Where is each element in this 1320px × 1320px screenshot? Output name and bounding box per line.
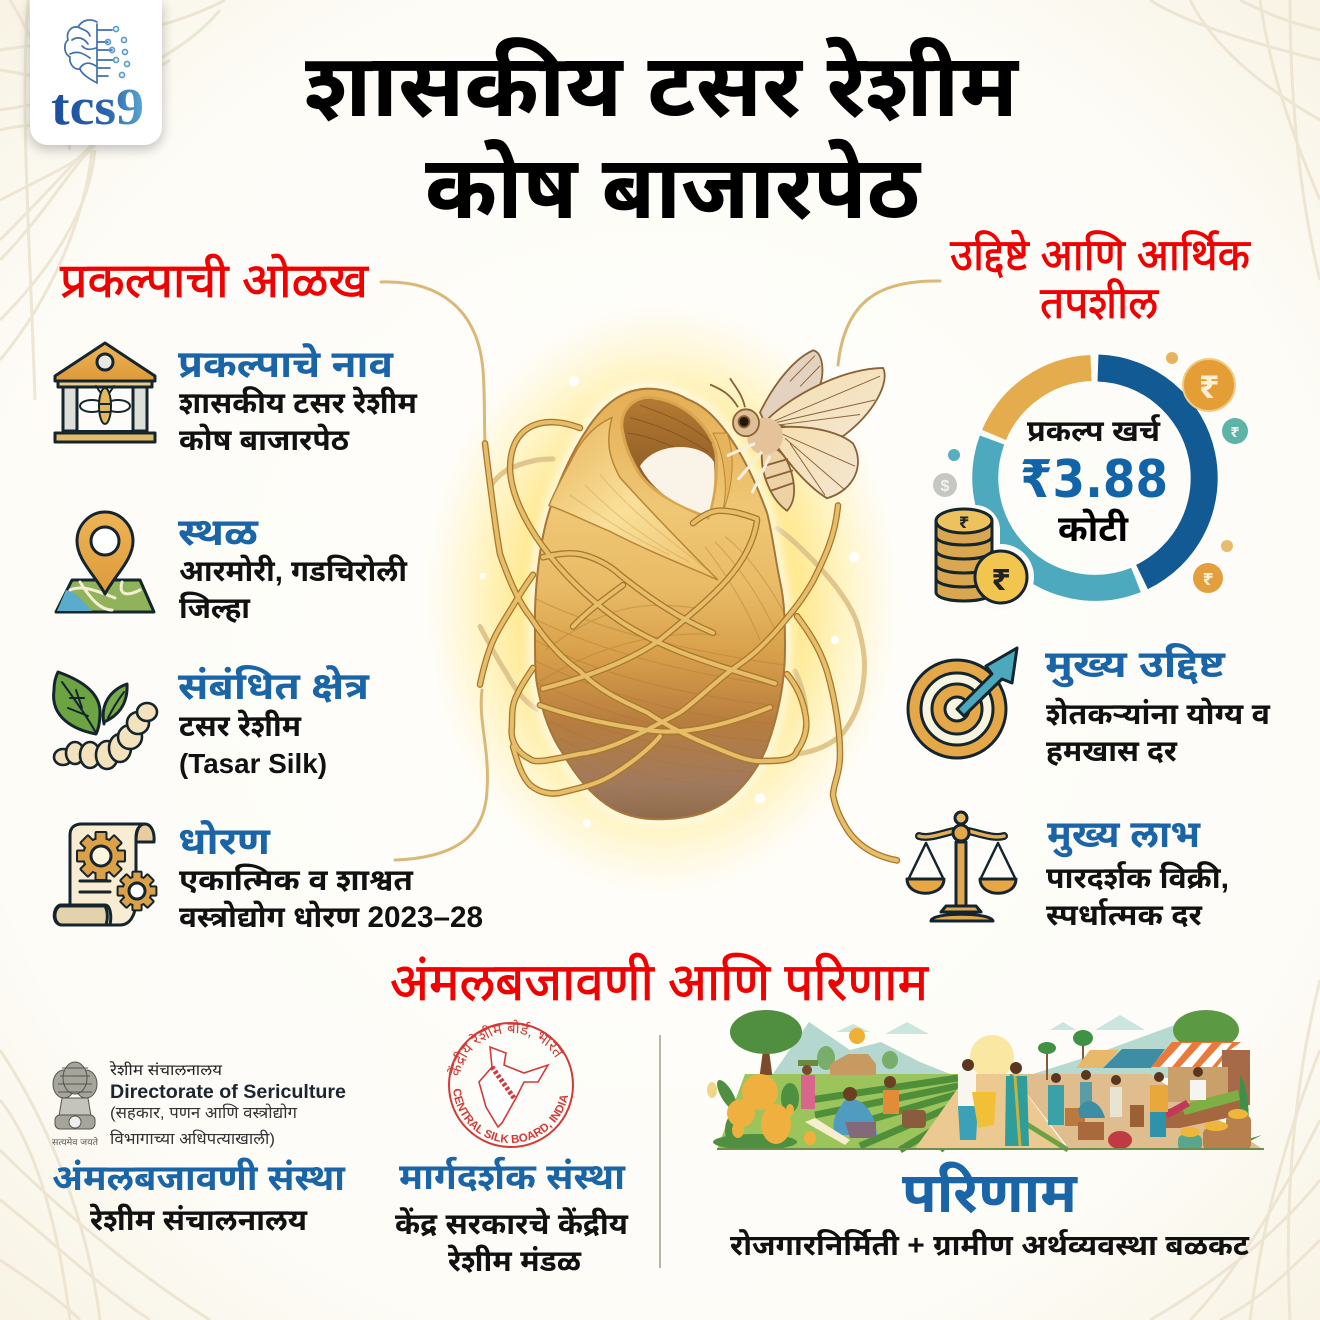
icon: coins around donut: ₹ xyxy=(1199,365,1219,406)
text: directorate details xyxy=(109,1061,346,1148)
title: कोष बाजारपेठ xyxy=(425,138,922,237)
cocoon with moth xyxy=(480,350,897,860)
heading: objectives and financial details: तपशील xyxy=(1040,278,1159,328)
icon: central silk board seal: केंद्रीय रेशीम बोर्ड, भारत xyxy=(447,1020,564,1076)
heading: objectives and financial details xyxy=(950,229,1251,328)
icon: coins around donut: ₹ xyxy=(1203,569,1213,590)
text: sector: टसर रेशीम xyxy=(179,708,301,743)
text: main benefit xyxy=(1046,814,1229,932)
text: outcome: रोजगारनिर्मिती + ग्रामीण अर्थव्यवस्था बळकट xyxy=(730,1229,1250,1262)
house xyxy=(830,1054,876,1075)
central glow xyxy=(417,295,907,905)
cocoon body xyxy=(535,389,785,819)
icon: coin stack: ₹ xyxy=(959,512,969,532)
text: guiding agency: रेशीम मंडळ xyxy=(447,1243,582,1278)
farm workers xyxy=(798,1060,818,1066)
path xyxy=(914,1074,1068,1150)
text: location: जिल्हा xyxy=(179,591,251,625)
text: project name: कोष बाजारपेठ xyxy=(179,422,350,457)
cocoons and leaves left xyxy=(707,1077,799,1150)
text: directorate details: रेशीम संचालनालय xyxy=(109,1061,222,1079)
icon: coin stack: ₹ xyxy=(991,560,1011,598)
text: main benefit: पारदर्शक विक्री, xyxy=(1046,861,1229,895)
text: guiding agency: मार्गदर्शक संस्था xyxy=(399,1156,626,1197)
icon: building with silk moth xyxy=(55,343,155,442)
cocoon fold highlight xyxy=(549,418,718,580)
wrapped threads light xyxy=(480,422,897,860)
heading: objectives and financial details: उद्दिष्टे आणि आर्थिक xyxy=(950,229,1251,280)
text: guiding agency: केंद्र सरकारचे केंद्रीय xyxy=(395,1206,629,1241)
text: policy: धोरण xyxy=(178,819,272,863)
title xyxy=(305,36,1020,237)
text: main objective: हमखास दर xyxy=(1046,735,1178,768)
panel: implementation and outcome xyxy=(52,952,1264,1278)
text: main benefit: मुख्य लाभ xyxy=(1047,814,1201,858)
back threads xyxy=(480,459,865,754)
heading: project identity: प्रकल्पाची ओळख xyxy=(60,254,369,308)
panel: project identity xyxy=(54,254,483,934)
text: policy: एकात्मिक व शाश्वत xyxy=(179,863,414,897)
cocoon strands xyxy=(535,474,790,812)
connector threads xyxy=(381,281,940,860)
cavity strands xyxy=(628,405,712,452)
icon: coins around donut: ₹ xyxy=(1230,424,1240,441)
icon: scroll and gears xyxy=(54,824,155,925)
text: project name: शासकीय टसर रेशीम xyxy=(179,385,417,420)
halo rim xyxy=(535,389,785,819)
text: sector xyxy=(178,664,370,779)
cocoon opening rim xyxy=(713,433,732,514)
icon: target with arrow xyxy=(908,648,1017,758)
tree xyxy=(762,1043,770,1073)
text: project name: प्रकल्पाचे नाव xyxy=(178,342,394,386)
cavity xyxy=(622,397,717,518)
silk ball xyxy=(640,447,715,516)
text: implementing agency: अंमलबजावणी संस्था xyxy=(52,1157,346,1198)
donut chart: project cost: कोटी xyxy=(1058,508,1129,549)
text: project name xyxy=(178,342,417,457)
icon: coin stack xyxy=(930,505,1034,610)
logo card: tcs9 xyxy=(51,79,144,136)
text: sector: (Tasar Silk) xyxy=(179,748,327,779)
icon: national emblem: सत्यमेव जयते xyxy=(52,1136,99,1147)
text: directorate details: Directorate of Sericulture xyxy=(110,1082,346,1103)
icon: national emblem xyxy=(52,1062,99,1147)
trading couple xyxy=(962,1059,974,1071)
text: outcome xyxy=(730,1161,1250,1262)
heading: implementation and outcome: अंमलबजावणी आणि परिणाम xyxy=(390,954,929,1012)
text: outcome: परिणाम xyxy=(902,1161,1078,1224)
logo card xyxy=(30,0,162,145)
text: directorate details: विभागाच्या अधिपत्याखाली) xyxy=(110,1129,275,1148)
text: main objective xyxy=(1045,642,1271,768)
text: location: आरमोरी, गडचिरोली xyxy=(179,554,408,588)
icon: location pin on map xyxy=(56,512,154,612)
text: policy: वस्त्रोद्योग धोरण 2023–28 xyxy=(179,900,483,934)
field xyxy=(717,1074,1060,1150)
icon: balance scales xyxy=(907,812,1016,921)
text: guiding agency xyxy=(395,1156,629,1278)
icon: central silk board seal xyxy=(447,1020,574,1148)
icon: leaf and silkworm xyxy=(54,672,157,769)
text: implementing agency: रेशीम संचालनालय xyxy=(89,1202,308,1237)
sparkles xyxy=(480,376,859,827)
icon: coins around donut: $ xyxy=(941,478,950,495)
text: implementing agency xyxy=(52,1157,346,1237)
text: location xyxy=(178,512,408,625)
text: directorate details: (सहकार, पणन आणि वस्त्रोद्योग xyxy=(110,1104,298,1122)
illustration: farm to market scene xyxy=(707,1010,1264,1150)
wrapped threads dark xyxy=(480,422,897,860)
text: policy xyxy=(178,819,483,934)
text: main benefit: स्पर्धात्मक दर xyxy=(1046,898,1203,932)
icon: coins around donut xyxy=(933,352,1248,593)
donut chart: project cost xyxy=(985,368,1204,588)
text: main objective: मुख्य उद्दिष्ट xyxy=(1045,642,1227,688)
palm xyxy=(1047,1030,1083,1080)
panel: objectives and finance xyxy=(907,229,1271,932)
text: sector: संबंधित क्षेत्र xyxy=(178,664,370,708)
moth xyxy=(710,350,885,511)
icon: central silk board seal: CENTRAL SILK BOARD, INDIA xyxy=(454,1088,568,1144)
title: शासकीय टसर रेशीम xyxy=(305,36,1020,135)
market stalls xyxy=(1076,1050,1119,1068)
donut chart: project cost: प्रकल्प खर्च xyxy=(1027,414,1161,448)
text: location: स्थळ xyxy=(178,512,259,554)
donut chart: project cost: ₹3.88 xyxy=(1020,450,1168,510)
text: main objective: शेतकऱ्यांना योग्य व xyxy=(1046,696,1271,731)
